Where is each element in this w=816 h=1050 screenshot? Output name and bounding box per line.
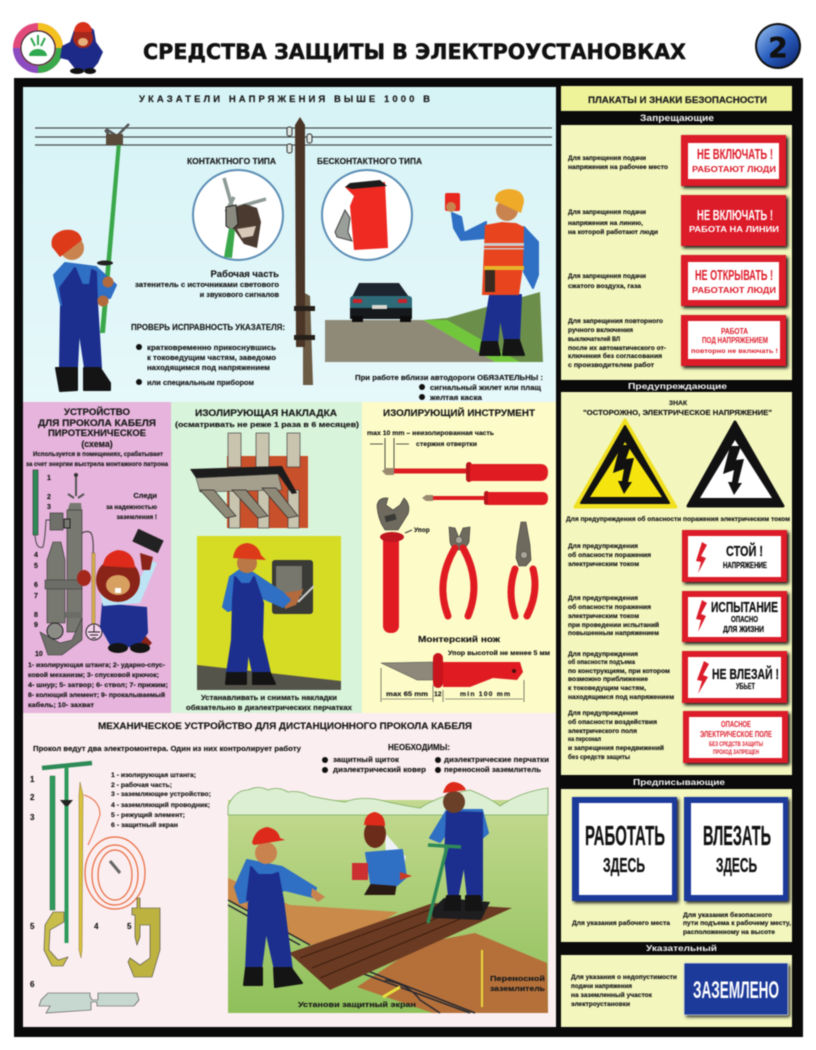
callout: check grounding: Следи — [133, 491, 157, 500]
sign: climb here — [684, 797, 790, 903]
sign row: do not switch, people working: напряжения на рабочее место — [568, 163, 668, 171]
heading: insulating cover: (осматривать не реже 1 раза в 6 месяцев) — [175, 420, 360, 429]
illustration: worker at wall — [197, 536, 341, 690]
sign row: live work, no reclose: РАБОТА — [721, 327, 748, 336]
device part numbers: 10 — [35, 651, 43, 658]
sign row: live work, no reclose: с производителем работ — [568, 361, 654, 369]
sign row: do not climb: Для предупреждения — [568, 651, 638, 658]
sign row: electric field: БЕЗ СРЕДСТВ ЗАЩИТЫ — [709, 741, 763, 748]
device part numbers: 9 — [34, 622, 38, 629]
icon: white warning triangle — [688, 422, 783, 506]
caption: grounded: подачи напряжения — [571, 983, 632, 990]
sign row: live work, no reclose: ручного включения — [568, 327, 633, 334]
caption: climb here: пути подъема к рабочему месту, — [683, 919, 791, 927]
annotation: knife dimensions: min 100 mm — [460, 691, 510, 698]
panel: warning signs — [561, 392, 792, 775]
caption: working part — [135, 269, 279, 299]
sign row: do not climb: возможно приближение — [568, 675, 648, 683]
scene label: portable grounding: заземлитель — [490, 984, 545, 993]
subheading: contact type: КОНТАКТНОГО ТИПА — [187, 157, 276, 166]
heading: mechanical device: МЕХАНИЧЕСКОЕ УСТРОЙСТВО ДЛЯ ДИСТАНЦИОННОГО ПРОКОЛА КАБЕЛЯ — [98, 720, 472, 731]
sign row: testing: ДЛЯ ЖИЗНИ — [723, 624, 764, 634]
sign row: do not switch, people working: Для запрещения подачи — [568, 155, 646, 162]
device legend: 4- шнур; 5- затвор; 6- ствол; 7- прижим; — [28, 682, 168, 689]
panel: pyrotechnic cable puncture device — [23, 402, 171, 713]
panel: prohibiting signs — [561, 125, 792, 380]
sign row: live work, no reclose: ПОД НАПРЯЖЕНИЕМ — [702, 336, 768, 345]
subheading: contactless type: БЕСКОНТАКТНОГО ТИПА — [317, 157, 422, 166]
sign row: do not switch, line work: НЕ ВКЛЮЧАТЬ ! — [697, 207, 773, 224]
sign row: do not switch, people working: НЕ ВКЛЮЧАТЬ ! — [697, 146, 773, 163]
heading: device: УСТРОЙСТВО — [64, 406, 130, 417]
sign row: do not climb — [568, 651, 789, 705]
diagram numbers: 1 — [30, 775, 35, 784]
illustration: field work scene — [228, 782, 548, 1013]
device part numbers: 1 — [47, 475, 51, 482]
sign row: stop, voltage: Для предупреждения — [568, 543, 638, 550]
device legend: 1- изолирующая штанга; 2- ударно-спус- — [28, 662, 165, 669]
list: required items: защитный щиток — [333, 755, 399, 764]
legend: device parts: 3 - заземляющее устройство; — [111, 790, 211, 798]
diagram: puncture device — [33, 470, 102, 655]
sign row: electric field: ЭЛЕКТРИЧЕСКОЕ ПОЛЕ — [700, 730, 772, 739]
device part numbers: 4 — [34, 552, 38, 559]
heading: warning sign — [583, 400, 772, 417]
list: required items: диэлектрический ковер — [333, 765, 427, 774]
scene label: portable grounding — [490, 974, 545, 993]
list: required items: переносной заземлитель — [444, 765, 541, 774]
header: indicating: Указательный — [646, 943, 717, 953]
scene label: protective screen: Установи защитный экран — [298, 1000, 416, 1009]
callout: check grounding — [106, 491, 158, 521]
sign row: live work, no reclose: после их автоматического от- — [568, 345, 666, 352]
icon: adjustable wrench — [377, 498, 430, 633]
caption: climb here: расположенному на высоте — [683, 929, 775, 936]
sign: work here: РАБОТАТЬ — [585, 820, 665, 851]
annotation: knife dimensions: 12 — [434, 691, 442, 698]
caption: cover instructions — [186, 693, 353, 712]
icon: contact indicator detail — [193, 170, 283, 260]
checklist: check the indicator: находящимся под напряжением — [147, 363, 270, 372]
panel: indicating sign — [561, 955, 792, 1027]
heading: device: (схема) — [81, 439, 113, 449]
diagram numbers: 4 — [94, 922, 99, 931]
worker with contactless indicator — [445, 189, 538, 355]
heading: device: за счет энергии выстрела монтажного патрона — [26, 461, 168, 468]
sign row: live work, no reclose: ключения без согласования — [568, 352, 662, 360]
overhead wires — [35, 128, 552, 145]
diagram numbers — [30, 775, 132, 989]
icon: short screwdriver — [422, 491, 548, 505]
device part numbers: 5 — [34, 563, 38, 570]
device part numbers: 8 — [34, 612, 38, 619]
device part numbers — [34, 475, 51, 658]
heading: insulating tools: ИЗОЛИРУЮЩИЙ ИНСТРУМЕНТ — [383, 407, 536, 418]
title: СРЕДСТВА ЗАЩИТЫ В ЭЛЕКТРОУСТАНОВКАХ — [143, 40, 686, 64]
checklist: check the indicator: к токоведущим частям, заведомо — [147, 353, 276, 362]
caption: grounded: Для указания о недопустимости — [571, 974, 677, 981]
sign row: testing: электрическим током — [568, 613, 639, 620]
header: prohibiting: Запрещающие — [640, 113, 714, 123]
caption: grounded — [571, 974, 677, 1008]
sign row: testing — [568, 591, 789, 644]
panel: insulating tools — [362, 402, 556, 713]
sign row: testing: при проведении испытаний — [568, 621, 659, 629]
sign row: do not open: Для запрещения подачи — [568, 273, 646, 280]
device part numbers: 3 — [47, 504, 51, 511]
caption: electric shock danger: Для предупреждения об опасности поражения электрическим током — [566, 515, 790, 523]
sign row: do not switch, line work: Для запрещения подачи — [568, 209, 646, 216]
sign row: do not switch, line work: напряжения на линию, — [568, 220, 643, 227]
sign row: testing: об опасности поражения — [568, 603, 651, 611]
sign row: stop, voltage: электрическим током — [568, 561, 639, 568]
sign row: live work, no reclose: Для запрещения повторного — [568, 318, 663, 325]
device legend: кабель; 10- захват — [28, 701, 94, 709]
caption: climb here — [683, 911, 791, 936]
sign row: do not switch, line work — [568, 195, 788, 248]
device legend: ковой механизм; 3- спусковой крючок; — [28, 671, 159, 679]
caption: cover instructions: обязательно в диэлектрических перчатках — [186, 703, 353, 712]
sign row: electric field: электрического поля — [568, 728, 637, 735]
legend: device parts: 6 - защитный экран — [111, 821, 178, 829]
checklist: check the indicator — [131, 322, 285, 387]
icon: cutting pliers — [443, 527, 474, 616]
sign row: testing: повышенным напряжением — [568, 630, 659, 637]
illustration: cover on busbars — [190, 433, 308, 528]
panel: insulating cover — [171, 402, 362, 713]
panel: posters heading: ПЛАКАТЫ И ЗНАКИ БЕЗОПАСНОСТИ — [588, 95, 767, 105]
list: required items: диэлектрические перчатки — [444, 755, 549, 764]
worker with contact indicator — [52, 124, 129, 391]
caption: cover instructions: Устанавливать и снимать накладки — [201, 693, 337, 702]
callout: check grounding: заземления ! — [117, 514, 157, 521]
device legend — [28, 662, 168, 709]
panel: mechanical puncture device — [23, 713, 556, 1027]
subheading: lineman knife: Монтерский нож — [418, 634, 500, 644]
sign row: do not climb: об опасности подъема — [568, 658, 635, 666]
legend: device parts: 4 - заземляющий проводник; — [111, 801, 210, 809]
sign row: do not switch, people working — [568, 135, 788, 188]
caption: working part: Рабочая часть — [210, 269, 279, 280]
sign row: do not climb: НЕ ВЛЕЗАЙ ! — [712, 665, 779, 683]
scene label: portable grounding: Переносной — [490, 974, 545, 983]
sign row: stop, voltage: НАПРЯЖЕНИЕ — [723, 560, 767, 570]
note: near a road — [355, 373, 543, 402]
checklist: check the indicator: кратковременно прикоснувшись — [147, 343, 276, 352]
sign row: do not climb: УБЬЕТ — [736, 681, 756, 691]
sign row: live work, no reclose: выключателей ВЛ — [568, 335, 620, 343]
heading: device: Используется в помещениях, срабатывает — [33, 450, 163, 458]
sign row: electric field: на персонал — [568, 736, 601, 743]
sign row: stop, voltage — [568, 530, 789, 584]
legend: device parts — [111, 772, 211, 829]
sign row: live work, no reclose: повторно не включать ! — [691, 348, 778, 355]
icon: adjustable wrench: Упор — [414, 527, 430, 534]
panel: voltage indicators — [23, 87, 556, 402]
icon: yellow warning triangle — [575, 420, 676, 507]
icon: lineman knife — [381, 653, 523, 688]
panel: mandatory signs — [561, 789, 792, 942]
logo: safety emblem — [13, 23, 63, 73]
legend: device parts: 5 - режущий элемент; — [111, 811, 185, 819]
sign row: live work, no reclose — [568, 315, 788, 369]
page number badge — [755, 23, 801, 69]
annotation: knife stop: Упор высотой не менее 5 мм — [448, 649, 550, 657]
road with car — [325, 283, 543, 362]
callout: check grounding: за надежностью — [106, 504, 158, 511]
sign row: testing: ОПАСНО — [731, 614, 758, 624]
diagram: device kit — [39, 763, 160, 1013]
sign: work here — [572, 797, 679, 903]
sign row: electric field: и запрещения передвижений — [568, 744, 664, 752]
note: near a road: сигнальный жилет или плащ — [430, 383, 542, 392]
sign row: electric field: об опасности воздействия — [568, 718, 657, 726]
list: required items — [322, 743, 549, 774]
sign row: do not open — [568, 255, 788, 308]
panel: posters heading — [561, 86, 792, 111]
text: procedure note: Прокол ведут два электромонтера. Один из них контролирует работу — [33, 744, 302, 753]
icon: contactless indicator detail — [322, 170, 412, 260]
heading: insulating cover: ИЗОЛИРУЮЩАЯ НАКЛАДКА — [195, 408, 338, 418]
sign: grounded — [684, 963, 790, 1017]
checklist: check the indicator: ПРОВЕРЬ ИСПРАВНОСТЬ УКАЗАТЕЛЯ: — [131, 322, 285, 332]
device part numbers: 2 — [47, 494, 51, 501]
sign row: do not switch, people working: РАБОТАЮТ ЛЮДИ — [692, 164, 776, 174]
legend: device parts: 1 - изолирующая штанга; — [111, 772, 196, 779]
caption: grounded: на заземленный участок — [571, 991, 653, 999]
sign row: do not open: сжатого воздуха, газа — [568, 283, 641, 290]
sign row: do not open: РАБОТАЮТ ЛЮДИ — [692, 285, 776, 295]
sign row: do not climb: по конструкциям, при котором — [568, 668, 670, 675]
diagram numbers: 5 — [30, 922, 35, 931]
heading: warning sign: "ОСТОРОЖНО, ЭЛЕКТРИЧЕСКОЕ НАПРЯЖЕНИЕ" — [583, 408, 772, 417]
heading: warning sign: ЗНАК — [669, 400, 688, 407]
sign row: electric field: без средств защиты — [568, 753, 630, 761]
list: required items: НЕОБХОДИМЫ: — [388, 743, 450, 752]
sign row: electric field — [568, 710, 790, 765]
heading: device: ДЛЯ ПРОКОЛА КАБЕЛЯ — [38, 418, 156, 428]
heading: voltage indicators: УКАЗАТЕЛИ НАПРЯЖЕНИЯ ВЫШЕ 1000 В — [139, 94, 430, 105]
diagram numbers: 6 — [30, 980, 35, 989]
icon: long screwdriver — [382, 462, 548, 482]
sign row: testing: Для предупреждения — [568, 595, 638, 602]
caption: grounded: электроустановки — [571, 1001, 630, 1008]
device part numbers: 7 — [34, 593, 38, 600]
note: near a road: При работе вблизи автодороги ОБЯЗАТЕЛЬНЫ : — [355, 373, 543, 382]
diagram numbers: 3 — [30, 813, 35, 822]
heading: device: ПИРОТЕХНИЧЕСКОЕ — [48, 428, 146, 438]
diagram numbers: 2 — [30, 793, 35, 802]
utility pole — [287, 117, 315, 385]
annotation: uninsulated part: стержня отвертки — [416, 441, 477, 448]
icon: pliers — [511, 522, 535, 616]
legend: device parts: 2 - рабочая часть; — [111, 781, 172, 789]
heading: device — [26, 406, 168, 468]
annotation: uninsulated part: max 10 mm – неизолированная часть — [367, 430, 494, 437]
sign: climb here: ЗДЕСЬ — [716, 855, 757, 877]
caption: climb here: Для указания безопасного — [683, 911, 772, 919]
sign row: do not switch, line work: РАБОТА НА ЛИНИИ — [689, 224, 779, 234]
annotation: uninsulated part — [367, 430, 494, 470]
sign row: stop, voltage: об опасности поражения — [568, 551, 651, 559]
sign row: electric field: Для предупреждения — [568, 710, 638, 717]
device legend: 8- колющий элемент; 9- прокалываемый — [28, 691, 165, 699]
page number badge: 2 — [768, 31, 788, 64]
caption: working part: затенитель с источниками светового — [135, 280, 279, 289]
sign row: do not climb: находящимся под напряжением — [568, 694, 674, 701]
sign row: do not switch, line work: на которой работают люди — [568, 228, 658, 236]
sign row: do not climb: к токоведущим частям, — [568, 685, 646, 692]
sign row: stop, voltage: СТОЙ ! — [726, 542, 763, 560]
device part numbers: 6 — [34, 582, 38, 589]
logo: mascot — [60, 22, 103, 74]
header: mandatory: Предписывающие — [633, 777, 725, 787]
sign: work here: ЗДЕСЬ — [603, 855, 645, 877]
sign row: electric field: ПРОХОД ЗАПРЕЩЕН — [713, 749, 759, 756]
checklist: check the indicator: или специальным прибором — [147, 378, 254, 387]
note: near a road: желтая каска — [429, 393, 483, 402]
caption: working part: и звукового сигналов — [200, 290, 279, 299]
caption: work here: Для указания рабочего места — [572, 919, 670, 927]
sign row: testing: ИСПЫТАНИЕ — [711, 600, 778, 616]
annotation: knife dimensions: max 65 mm — [386, 691, 428, 698]
heading: insulating cover — [175, 408, 360, 429]
diagram numbers: 5 — [127, 922, 132, 931]
mascot: beaver — [77, 529, 164, 653]
header: warning: Предупреждающие — [628, 381, 727, 391]
sign row: electric field: ОПАСНОЕ — [721, 720, 751, 729]
annotation: knife dimensions — [381, 668, 524, 702]
